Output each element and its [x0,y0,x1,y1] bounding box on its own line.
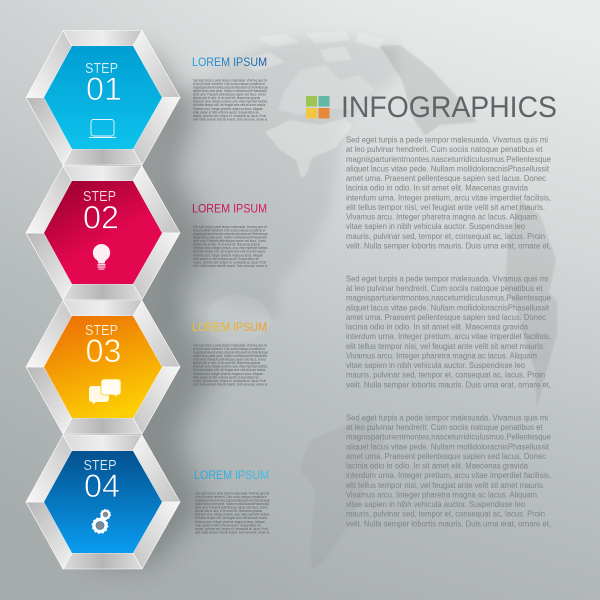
small text block 1: Sed eget turpis a pede tempor malesuada. Vivamus quis mi [193,78,267,82]
paragraph 3: lacinia odio in odio. In sit amet elit. Maecenas gravida [346,462,529,470]
blue face [44,46,162,149]
bevel frame 2 [26,166,180,300]
step label 4: STEP [84,458,116,474]
paragraph 3: mauris, pulvinar sed, tempor et, consequat ac, lacus. Proin [346,510,545,519]
blue face [44,451,162,553]
bevel frame 4 [26,435,180,569]
paragraph 2: amet urna. Praesent pellentesque sapien sed lacus. Donec [346,313,546,322]
paragraph 2: interdum urna. Integer pretium, arcu vitae imperdiet facilisis, [346,332,551,341]
small text block 2: Sed eget turpis a pede tempor malesuada. Vivamus quis mi [193,225,267,229]
crimson face [44,181,162,284]
step 4 hexagon [26,435,180,569]
step number 01: 01 [86,71,122,107]
paragraph 1: elit tellus tempor nisi, vel feugiat ante velit sit amet mauris. [346,203,545,212]
paragraph 1: aliquet lacus vitae pede. Nullam mollidoloracnisPhasellussit [346,164,550,173]
small text block 4: amet urna. Praesent pellentesque sapien sed lacus. Donec [195,506,268,510]
world globe map [160,31,557,570]
step label 3: STEP [85,323,118,339]
orange face [44,316,162,418]
paragraph 3: magnisparturientmontes,nasceturridiculusmus.Pellentesque [346,433,552,442]
small text block 1 [193,78,268,121]
title: INFOGRAPHICS [341,91,557,124]
heading: lorem ipsum 4: LOREM IPSUM [194,468,269,482]
small text block 4: at leo pulvinar hendrerit. Cum sociis natoque penatibus et [195,495,267,499]
small text block 1: amet urna. Praesent pellentesque sapien sed lacus. Donec [193,93,266,97]
paragraph 2: vitae sapien in nibh vehicula auctor. Suspendisse leo [346,361,526,370]
small text block 3: amet urna. Praesent pellentesque sapien sed lacus. Donec [193,358,266,362]
small text block 2: magnisparturientmontes,nasceturridiculusmus.Pellentesque [193,232,268,236]
small text block 2: velit. Nulla semper lobortis mauris. Duis urna erat, ornare et, [193,264,268,268]
hexagon drop shadow [90,50,215,565]
small text block 2 [193,225,268,268]
paragraph 3: Vivamus arcu. Integer pharetra magna ac lacus. Aliquam [346,490,537,499]
small text block 3: velit. Nulla semper lobortis mauris. Duis urna erat, ornare et, [193,382,268,386]
small text block 4: interdum urna. Integer pretium, arcu vitae imperdiet facilisis, [195,513,270,517]
paragraph 3: elit tellus tempor nisi, vel feugiat ante velit sit amet mauris. [346,481,545,490]
small text block 3: Sed eget turpis a pede tempor malesuada. Vivamus quis mi [193,344,267,348]
paragraph 3: amet urna. Praesent pellentesque sapien sed lacus. Donec [346,452,546,461]
small text block 3: mauris, pulvinar sed, tempor et, consequat ac, lacus. Proin [193,379,266,383]
paragraph 3: vitae sapien in nibh vehicula auctor. Suspendisse leo [346,500,526,509]
bevel frame 1 [26,30,180,165]
small text block 2: mauris, pulvinar sed, tempor et, consequat ac, lacus. Proin [193,260,266,264]
paragraph 3: at leo pulvinar hendrerit. Cum sociis natoque penatibus et [346,423,543,432]
paragraph 2: Vivamus arcu. Integer pharetra magna ac lacus. Aliquam [346,351,537,360]
paragraph 1: velit. Nulla semper lobortis mauris. Duis urna erat, ornare et, [346,242,551,250]
paragraph 1: magnisparturientmontes,nasceturridiculusmus.Pellentesque [346,155,552,164]
small text block 1: aliquet lacus vitae pede. Nullam mollidoloracnisPhasellussit [193,89,267,93]
paragraph 2: elit tellus tempor nisi, vel feugiat ante velit sit amet mauris. [346,342,545,351]
small text block 2: interdum urna. Integer pretium, arcu vitae imperdiet facilisis, [193,246,268,250]
paragraph 1: interdum urna. Integer pretium, arcu vitae imperdiet facilisis, [346,193,551,202]
paragraph 1: Sed eget turpis a pede tempor malesuada. Vivamus quis mi [346,136,548,144]
step label 2: STEP [83,189,116,205]
step number 02: 02 [83,200,119,236]
step number 03: 03 [86,333,122,369]
small text block 1: mauris, pulvinar sed, tempor et, consequat ac, lacus. Proin [193,114,266,118]
step 1 hexagon [26,30,180,165]
small text block 2: amet urna. Praesent pellentesque sapien sed lacus. Donec [193,239,266,243]
small text block 1: at leo pulvinar hendrerit. Cum sociis natoque penatibus et [193,82,265,86]
small text block 3: at leo pulvinar hendrerit. Cum sociis natoque penatibus et [193,347,265,351]
small text block 3: elit tellus tempor nisi, vel feugiat ante velit sit amet mauris. [193,368,266,372]
paragraph 2: magnisparturientmontes,nasceturridiculusmus.Pellentesque [346,294,552,303]
paragraph 3: Sed eget turpis a pede tempor malesuada. Vivamus quis mi [346,413,548,422]
small text block 1: velit. Nulla semper lobortis mauris. Duis urna erat, ornare et, [193,117,268,121]
paragraph 1: amet urna. Praesent pellentesque sapien sed lacus. Donec [346,174,546,183]
paragraph 1: vitae sapien in nibh vehicula auctor. Suspendisse leo [346,222,526,231]
small text block 3: magnisparturientmontes,nasceturridiculusmus.Pellentesque [193,350,268,354]
paragraph 1: at leo pulvinar hendrerit. Cum sociis natoque penatibus et [346,145,543,154]
small text block 1: interdum urna. Integer pretium, arcu vitae imperdiet facilisis, [193,100,268,104]
icon: chat bubbles [89,379,121,404]
paragraph 1 [346,136,552,250]
small text block 4: Vivamus arcu. Integer pharetra magna ac lacus. Aliquam [195,520,265,524]
small text block 2: at leo pulvinar hendrerit. Cum sociis natoque penatibus et [193,228,265,232]
paragraph 3 [346,413,552,528]
paragraph 1: mauris, pulvinar sed, tempor et, consequat ac, lacus. Proin [346,232,545,241]
heading: lorem ipsum 3: LOREM IPSUM [192,320,267,334]
icon: light bulb [93,244,110,270]
paragraph 2 [346,274,552,389]
small text block 1: elit tellus tempor nisi, vel feugiat ante velit sit amet mauris. [193,103,266,107]
small text block 3: Vivamus arcu. Integer pharetra magna ac lacus. Aliquam [193,372,263,376]
small text block 2: Vivamus arcu. Integer pharetra magna ac lacus. Aliquam [193,253,263,257]
small text block 3: vitae sapien in nibh vehicula auctor. Suspendisse leo [193,375,259,379]
small text block 2: lacinia odio in odio. In sit amet elit. Maecenas gravida [193,243,260,247]
small text block 2: elit tellus tempor nisi, vel feugiat ante velit sit amet mauris. [193,250,266,254]
paragraph 3: velit. Nulla semper lobortis mauris. Duis urna erat, ornare et, [346,519,551,528]
small text block 4: aliquet lacus vitae pede. Nullam mollidoloracnisPhasellussit [195,502,269,506]
step number 04: 04 [84,468,120,504]
small text block 1: vitae sapien in nibh vehicula auctor. Suspendisse leo [193,110,259,114]
icon: gears [92,510,110,533]
small text block 4: Sed eget turpis a pede tempor malesuada. Vivamus quis mi [195,492,269,496]
bevel frame 3 [26,300,180,434]
small text block 4: vitae sapien in nibh vehicula auctor. Suspendisse leo [195,523,261,527]
heading: lorem ipsum 2: LOREM IPSUM [192,201,267,215]
paragraph 1: lacinia odio in odio. In sit amet elit. Maecenas gravida [346,184,529,193]
small text block 2: vitae sapien in nibh vehicula auctor. Suspendisse leo [193,257,259,261]
icon: four colour squares [306,96,330,118]
small text block 2: aliquet lacus vitae pede. Nullam mollidoloracnisPhasellussit [193,236,267,240]
paragraph 2: mauris, pulvinar sed, tempor et, consequat ac, lacus. Proin [346,371,545,380]
paragraph 2: Sed eget turpis a pede tempor malesuada. Vivamus quis mi [346,274,548,283]
step 2 hexagon [26,166,180,300]
paragraph 1: Vivamus arcu. Integer pharetra magna ac lacus. Aliquam [346,212,537,222]
paragraph 2: velit. Nulla semper lobortis mauris. Duis urna erat, ornare et, [346,380,551,389]
small text block 3: lacinia odio in odio. In sit amet elit. Maecenas gravida [193,361,260,365]
small text block 3: aliquet lacus vitae pede. Nullam mollidoloracnisPhasellussit [193,354,267,358]
icon: laptop [89,120,116,138]
paragraph 2: at leo pulvinar hendrerit. Cum sociis natoque penatibus et [346,284,543,293]
small text block 1: Vivamus arcu. Integer pharetra magna ac lacus. Aliquam [193,107,263,111]
small text block 4 [195,492,270,534]
small text block 4: lacinia odio in odio. In sit amet elit. Maecenas gravida [195,509,262,513]
heading: lorem ipsum 1: LOREM IPSUM [192,55,267,69]
small text block 4: mauris, pulvinar sed, tempor et, consequat ac, lacus. Proin [195,527,268,531]
small text block 4: magnisparturientmontes,nasceturridiculusmus.Pellentesque [195,498,270,502]
step label 1: STEP [85,61,118,77]
paragraph 3: aliquet lacus vitae pede. Nullam mollidoloracnisPhasellussit [346,442,550,451]
step 3 hexagon [26,300,180,434]
small text block 4: velit. Nulla semper lobortis mauris. Duis urna erat, ornare et, [195,530,270,534]
paragraph 2: aliquet lacus vitae pede. Nullam mollidoloracnisPhasellussit [346,303,550,312]
small text block 1: lacinia odio in odio. In sit amet elit. Maecenas gravida [193,96,260,100]
small text block 1: magnisparturientmontes,nasceturridiculusmus.Pellentesque [193,86,268,90]
paragraph 3: interdum urna. Integer pretium, arcu vitae imperdiet facilisis, [346,471,551,480]
small text block 3: interdum urna. Integer pretium, arcu vitae imperdiet facilisis, [193,365,268,369]
small text block 3 [193,344,268,386]
small text block 4: elit tellus tempor nisi, vel feugiat ante velit sit amet mauris. [195,516,268,520]
paragraph 2: lacinia odio in odio. In sit amet elit. Maecenas gravida [346,322,529,332]
